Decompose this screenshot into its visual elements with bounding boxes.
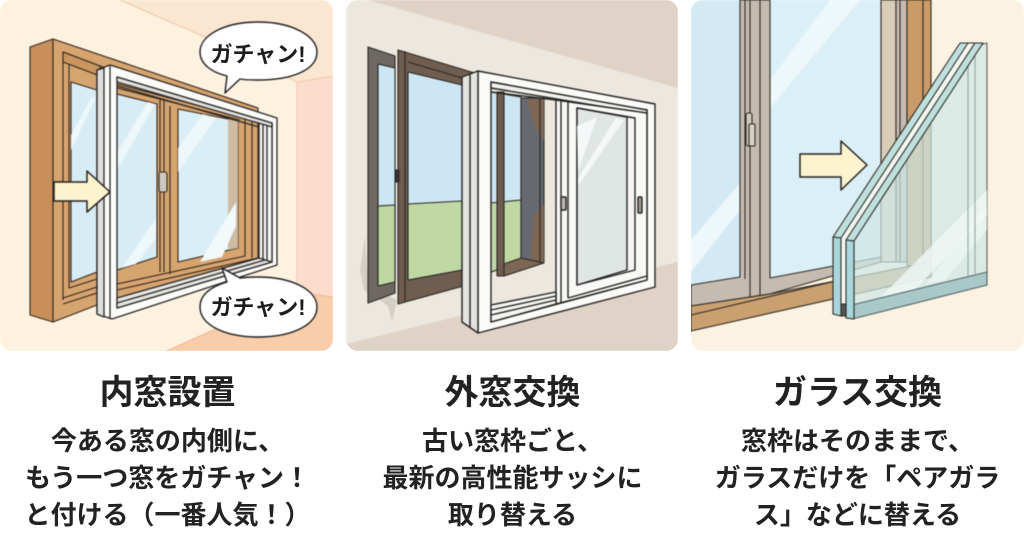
description: もう一つ窓をガチャン！ xyxy=(25,463,310,493)
pair glass pane xyxy=(833,43,987,319)
description: ス」などに替える xyxy=(754,500,961,530)
panel: glass replacement illustration xyxy=(691,0,1024,351)
callout text: bottom: ガチャン! xyxy=(210,295,306,320)
description xyxy=(715,426,1000,530)
description xyxy=(24,426,310,530)
caption: ガラス交換 xyxy=(715,374,1000,530)
arrow xyxy=(800,141,867,190)
arrow xyxy=(54,171,110,212)
speech bubble: bottom xyxy=(200,268,317,337)
description: 今ある窓の内側に、 xyxy=(51,426,284,456)
caption: 外窓交換 xyxy=(382,374,642,530)
description: ガラスだけを「ペアガラ xyxy=(715,463,1000,493)
panel: exterior window illustration xyxy=(346,0,678,351)
heading: 外窓交換 xyxy=(444,374,580,412)
existing sash and glass xyxy=(691,0,931,331)
description: 最新の高性能サッシに xyxy=(382,463,642,493)
heading: 内窓設置 xyxy=(100,374,236,412)
description: 窓枠はそのままで、 xyxy=(741,426,974,456)
new white inner frame xyxy=(97,65,277,319)
description xyxy=(382,426,642,530)
callout text: top: ガチャン! xyxy=(210,42,306,67)
wooden existing window xyxy=(30,39,258,322)
panel: interior window illustration xyxy=(0,0,333,351)
heading: ガラス交換 xyxy=(773,374,942,412)
description: と付ける（一番人気！） xyxy=(24,500,310,530)
caption: 内窓設置 xyxy=(24,374,310,530)
speech bubble: top xyxy=(200,22,317,93)
description: 取り替える xyxy=(448,500,577,530)
new white window frame xyxy=(462,71,655,333)
description: 古い窓枠ごと、 xyxy=(422,426,603,456)
old dark window xyxy=(360,47,556,322)
